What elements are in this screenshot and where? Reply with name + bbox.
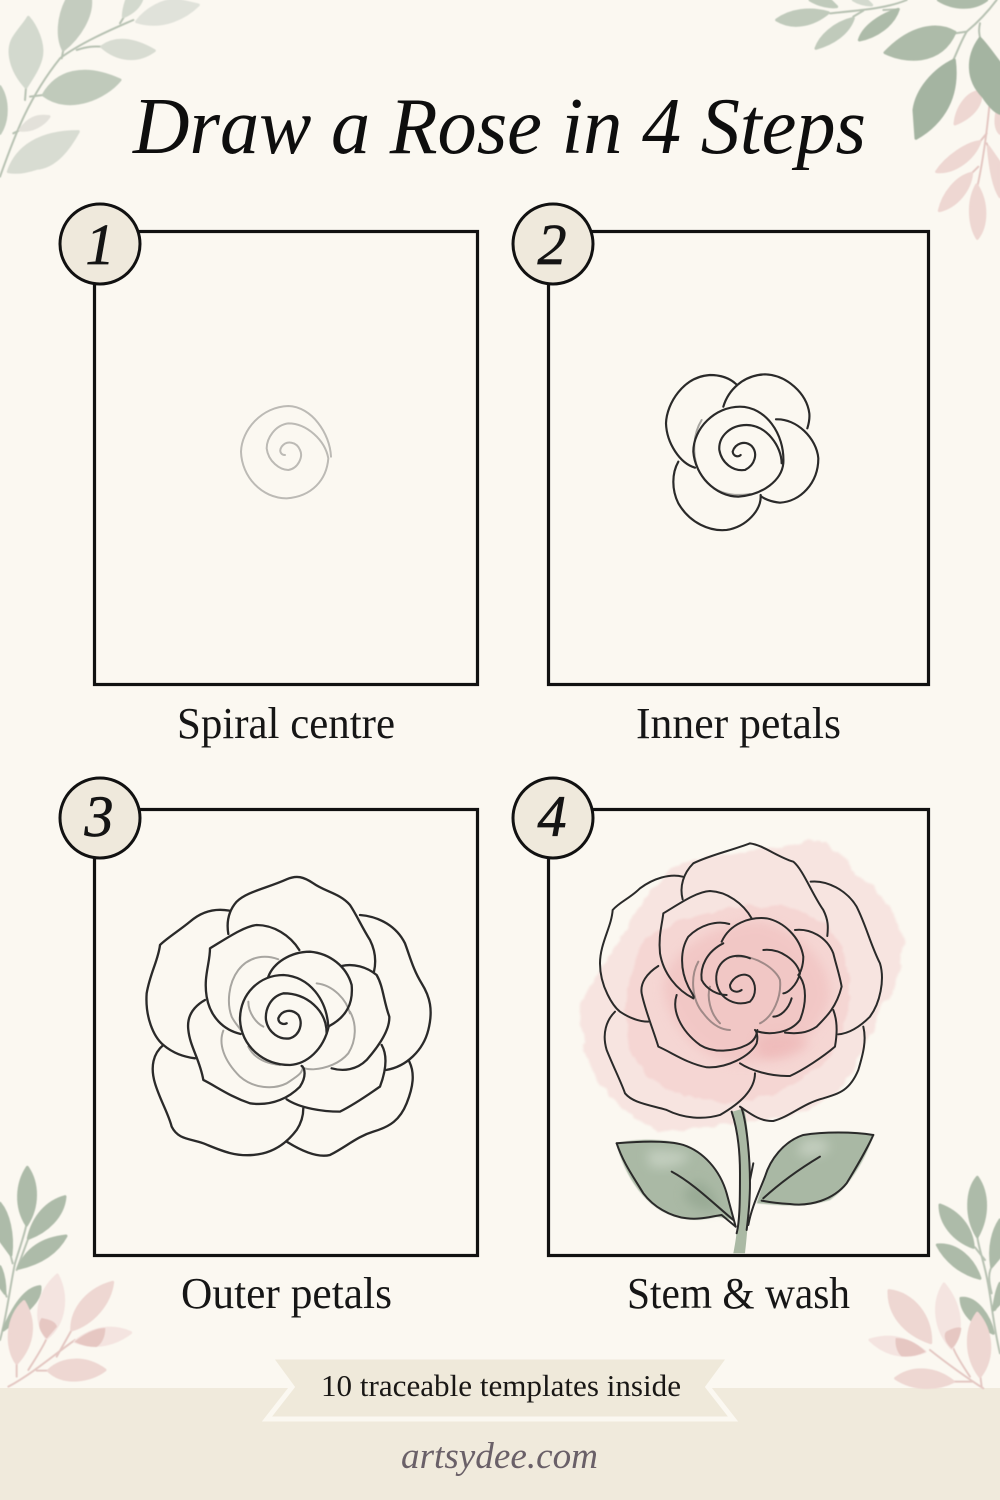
badge 2: [513, 204, 593, 284]
label: stem and wash: Stem & wash: [627, 1269, 850, 1318]
panel 1: spiral centre: [94, 232, 478, 684]
website: artsydee.com: [401, 1436, 598, 1477]
badge 1: [60, 204, 140, 284]
badge 4: [513, 778, 593, 858]
label: outer petals: Outer petals: [181, 1269, 392, 1318]
ribbon banner: [267, 1357, 733, 1419]
watercolour: stem and leaves: [617, 1108, 873, 1253]
title: Draw a Rose in 4 Steps: [132, 83, 866, 171]
drawing: rose with inner petals: [666, 374, 818, 530]
badge 2: 2: [538, 212, 566, 277]
ribbon text: 10 traceable templates inside: [321, 1368, 681, 1403]
label: spiral centre: Spiral centre: [177, 699, 395, 748]
ink: pencil inner details: [693, 957, 780, 1030]
panel 3: outer petals: [94, 810, 478, 1256]
badge 3: [60, 778, 140, 858]
drawing: finished rose with watercolour: [580, 840, 903, 1253]
panel 4: stem and wash: [548, 810, 928, 1256]
footer band: [0, 1388, 1000, 1500]
foliage: bottom left: [0, 1167, 131, 1387]
badge 3: 3: [84, 784, 114, 849]
ink: rose and leaf outlines: [600, 843, 882, 1233]
foliage: top left: [0, 0, 198, 177]
badge 1: 1: [86, 212, 114, 277]
drawing: pencil spiral: [241, 406, 331, 498]
drawing: rose with outer petals: [146, 877, 431, 1156]
panel 2: inner petals: [548, 232, 928, 684]
watercolour: pink wash: [580, 840, 903, 1131]
foliage: bottom right: [870, 1177, 1000, 1388]
badge 4: 4: [538, 784, 566, 849]
foliage: top right: [777, 0, 1000, 238]
label: inner petals: Inner petals: [636, 699, 841, 748]
